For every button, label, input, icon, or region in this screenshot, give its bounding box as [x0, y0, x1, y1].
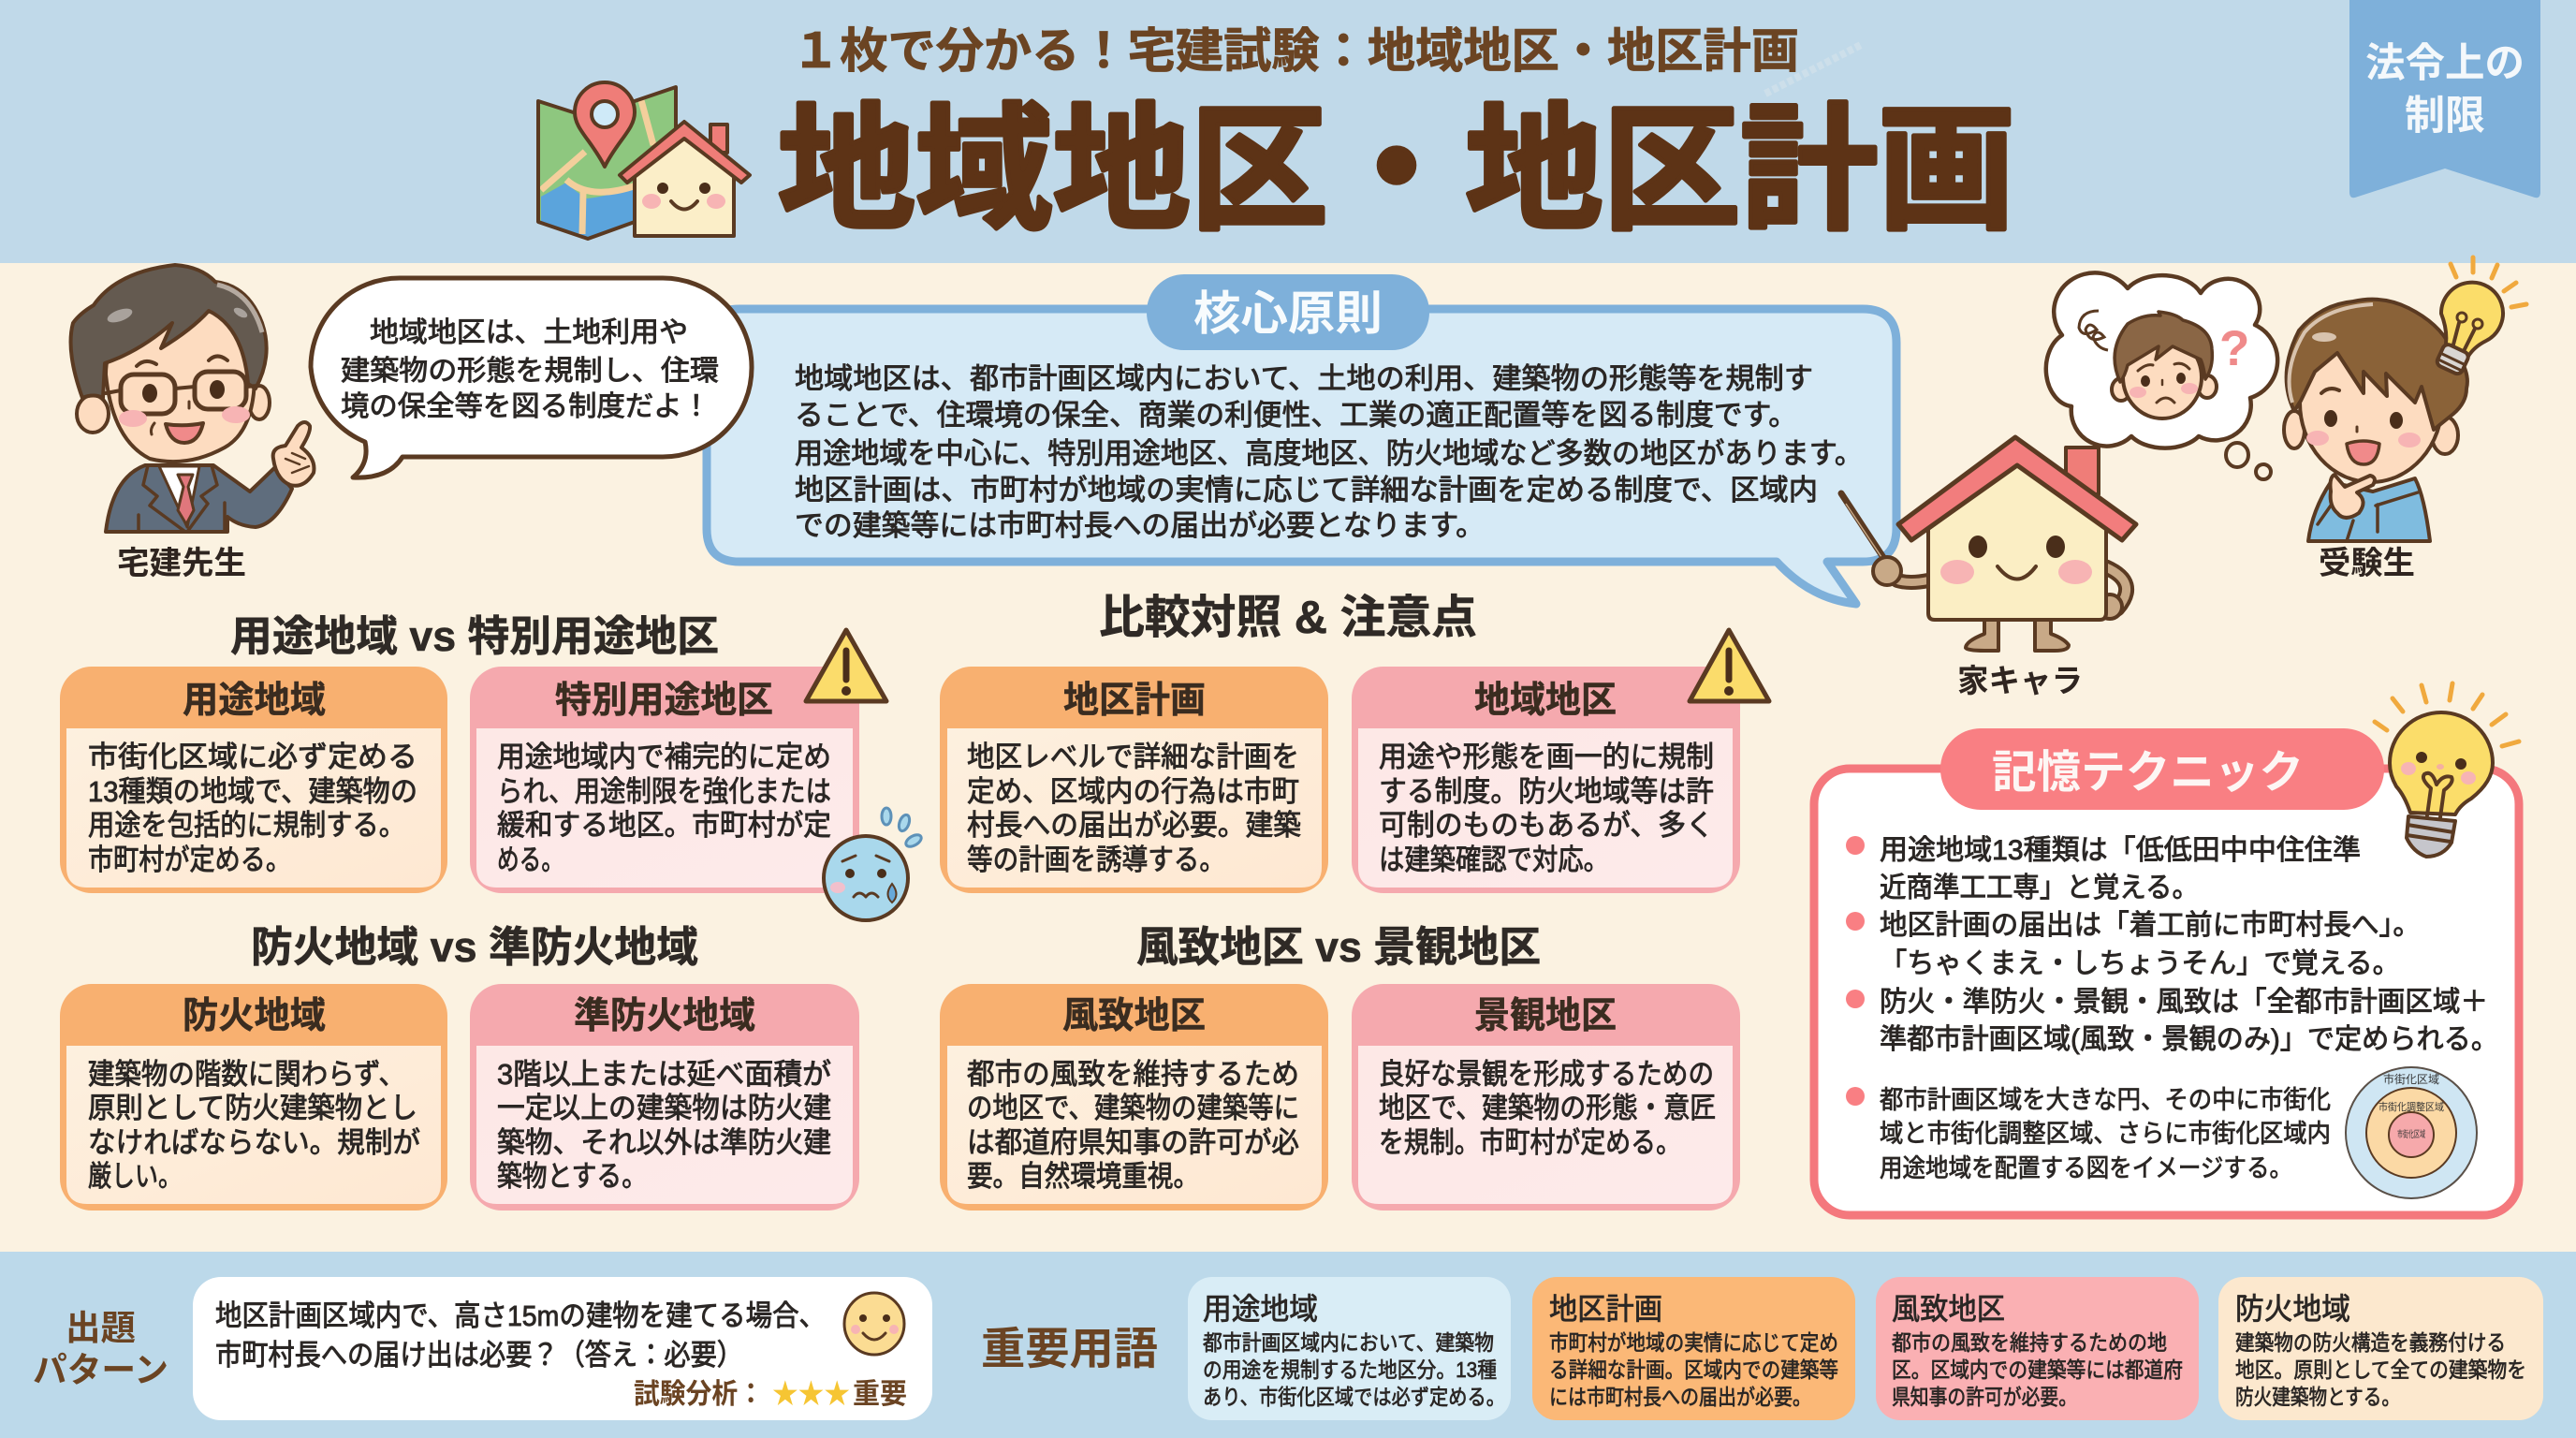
icon: smiley [844, 1293, 904, 1355]
core text [795, 362, 1863, 542]
roof [1898, 437, 2136, 540]
card text: は都道府県知事の許可が必 [967, 1126, 1299, 1159]
exam analysis rating: ★★★ [772, 1379, 850, 1410]
exam analysis rating [634, 1379, 907, 1410]
question mark: ? [2219, 321, 2249, 376]
tips list: 「ちゃくまえ・しちょうそん」で覚える。 [1880, 948, 2400, 979]
card: 地区計画 [940, 667, 1328, 893]
core text: 地域地区は、都市計画区域内において、土地の利用、建築物の形態等を規制す [795, 362, 1813, 395]
exam analysis rating: 試験分析： [634, 1379, 764, 1410]
card text: の地区で、建築物の建築等に [967, 1092, 1299, 1124]
card text: 築物、それ以外は準防火建 [497, 1126, 831, 1159]
suit [106, 465, 292, 532]
speech bubble: teacher: 地域地区は、土地利用や [370, 317, 688, 348]
core text: ることで、住環境の保全、商業の利便性、工業の適正配置等を図る制度です。 [795, 399, 1797, 432]
thought bubble [2046, 272, 2277, 479]
card text: める。 [497, 844, 564, 876]
card text [497, 1058, 831, 1193]
tips list [1846, 835, 2498, 1182]
term card: 地区計画: には市町村長への届出が必要。 [1549, 1385, 1811, 1409]
face [1969, 536, 1987, 558]
diagram: nested circles: 市街化区域 [2397, 1128, 2425, 1140]
card: 特別用途地区 [470, 667, 859, 893]
tips list: 都市計画区域を大きな円、その中に市街化 [1880, 1086, 2331, 1114]
speech bubble: teacher: 建築物の形態を規制し、住環 [341, 356, 719, 387]
chimney [2066, 448, 2099, 494]
card text: 築物とする。 [497, 1160, 647, 1193]
tips list: 地区計画の届出は「着工前に市町村長へ」。 [1880, 910, 2421, 941]
icon: smiling bulb [2375, 683, 2519, 857]
card text: 用途や形態を画一的に規制 [1379, 741, 1714, 773]
ribbon: 法令上の制限: 法令上の [2365, 41, 2525, 86]
card heading: 特別用途地区 [555, 681, 773, 721]
label: 出題パターン [33, 1309, 168, 1389]
speech bubble: teacher [311, 278, 752, 477]
heading: 防火地域 vs 準防火地域: 防火地域 vs 準防火地域 [251, 923, 698, 971]
label: 家キャラ [1957, 664, 2083, 699]
header band [0, 0, 2576, 263]
card text: 緩和する地区。市町村が定 [497, 809, 831, 842]
pill heading: 核心原則 [1193, 287, 1383, 340]
hand [2331, 475, 2375, 518]
card text: なければならない。規制が [88, 1126, 420, 1159]
term card: 用途地域: 用途地域 [1203, 1292, 1318, 1326]
core text: での建築等には市町村長への届出が必要となります。 [795, 509, 1485, 542]
card: 防火地域 [60, 984, 447, 1211]
card text: 建築物の階数に関わらず、 [88, 1058, 405, 1091]
body [2308, 478, 2430, 541]
card: 用途地域 [60, 667, 447, 893]
term card: 防火地域: 防火地域 [2235, 1292, 2350, 1326]
core text: 地区計画は、市町村が地域の実情に応じて詳細な計画を定める制度で、区域内 [795, 474, 1818, 506]
swirl [2079, 311, 2108, 350]
term card: 防火地域: 建築物の防火構造を義務付ける [2235, 1330, 2506, 1355]
card: 地域地区 [1352, 667, 1740, 893]
speech bubble: teacher: 境の保全等を図る制度だよ！ [341, 391, 710, 422]
card text: 原則として防火建築物とし [88, 1092, 417, 1124]
card heading: 用途地域 [183, 681, 326, 721]
term card: 風致地区: 風致地区 [1892, 1292, 2005, 1326]
term card: 風致地区: 区。区域内での建築等には都道府 [1892, 1357, 2183, 1382]
term card: 用途地域: 都市計画区域内において、建築物 [1203, 1330, 1494, 1355]
legs [1966, 618, 1998, 651]
exam analysis rating: 重要 [853, 1379, 907, 1410]
hair [2287, 300, 2467, 430]
ribbon: 法令上の制限 [2349, 0, 2540, 198]
card text [967, 741, 1301, 876]
main title: 地域地区・地区計画 [778, 94, 2015, 246]
footer band [0, 1252, 2576, 1438]
card: 景観地区 [1352, 984, 1740, 1211]
core text: 用途地域を中心に、特別用途地区、高度地区、防火地域など多数の地区があります。 [795, 437, 1863, 470]
diagram: nested circles [2346, 1067, 2477, 1198]
card text [88, 1058, 420, 1193]
card text: 地区で、建築物の形態・意匠 [1379, 1092, 1716, 1124]
term card: 風致地区: 都市の風致を維持するための地 [1892, 1330, 2167, 1355]
card text: 市街化区域に必ず定める [88, 741, 417, 773]
term card: 地区計画: る詳細な計画。区域内での建築等 [1549, 1357, 1838, 1382]
term card: 地区計画 [1532, 1277, 1855, 1420]
hand [273, 422, 314, 486]
diagram: nested circles: 市街化区域 [2383, 1073, 2439, 1086]
term card: 防火地域 [2218, 1277, 2543, 1420]
label: 受験生 [2319, 546, 2415, 581]
card text: られ、用途制限を強化または [497, 775, 831, 808]
icon: warning triangle right [1690, 630, 1769, 701]
idea bulb [2436, 257, 2526, 375]
card text: 用途を包括的に規制する。 [88, 809, 405, 842]
card text: 定め、区域内の行為は市町 [967, 775, 1299, 808]
body [1928, 465, 2106, 620]
character: 家キャラ [1841, 437, 2136, 699]
card text: する制度。防火地域等は許 [1379, 775, 1714, 808]
tips list: 準都市計画区域(風致・景観のみ)」で定められる。 [1880, 1024, 2498, 1055]
card heading: 地域地区 [1474, 681, 1617, 721]
panel: exam question: 市町村長への届け出は必要？（答え：必要） [215, 1339, 743, 1372]
card text [1379, 741, 1714, 876]
card: 準防火地域 [470, 984, 859, 1211]
panel: exam question: 地区計画区域内で、高さ15mの建物を建てる場合、 [215, 1299, 826, 1332]
card text [88, 741, 417, 876]
term card: 防火地域: 防火建築物とする。 [2235, 1385, 2400, 1409]
pill heading [1147, 274, 1429, 350]
diagram: nested circles: 市街化調整区域 [2378, 1100, 2444, 1113]
term card: 用途地域: の用途を規制するた地区分。13種 [1203, 1357, 1497, 1382]
label: 出題パターン: 出題 [66, 1309, 136, 1347]
ears [77, 395, 109, 433]
card text: 市町村が定める。 [88, 844, 291, 876]
heading: 風致地区 vs 景観地区: 風致地区 vs 景観地区 [1136, 923, 1541, 971]
icon: worried face [824, 808, 923, 920]
faint artefact [1765, 45, 1861, 94]
term card: 地区計画: 地区計画 [1549, 1292, 1662, 1326]
card text: 用途地域内で補完的に定め [497, 741, 831, 773]
panel: 核心原則 [707, 274, 1896, 604]
pill heading: 記憶テクニック [1992, 748, 2304, 798]
face [106, 309, 255, 462]
icon: map and house [538, 82, 750, 239]
card text [1379, 1058, 1716, 1159]
card text: を規制。市町村が定める。 [1379, 1126, 1681, 1159]
tips list: 用途地域を配置する図をイメージする。 [1880, 1154, 2292, 1182]
card text [497, 741, 831, 876]
card text: 都市の風致を維持するため [967, 1058, 1299, 1091]
card text [967, 1058, 1299, 1193]
hair [71, 265, 267, 398]
panel: 記憶テクニック [1814, 683, 2519, 1215]
icon: warning triangle left [806, 630, 886, 701]
ribbon: 法令上の制限: 制限 [2405, 94, 2485, 139]
face [2300, 323, 2442, 482]
card text: 可制のものもあるが、多く [1379, 809, 1714, 842]
ears [2284, 411, 2305, 448]
term card: 防火地域: 地区。原則として全ての建築物を [2235, 1357, 2526, 1382]
card heading: 景観地区 [1474, 996, 1617, 1036]
subtitle: １枚で分かる！宅建試験：地域地区・地区計画 [792, 24, 1799, 78]
term card: 風致地区: 県知事の許可が必要。 [1892, 1385, 2077, 1409]
pill heading [1940, 728, 2384, 810]
card text: 等の計画を誘導する。 [967, 844, 1225, 876]
term card: 風致地区 [1876, 1277, 2199, 1420]
tips list: 近商準工工専」と覚える。 [1880, 873, 2199, 903]
character: 受験生 [2284, 257, 2526, 581]
card text: 厳しい。 [88, 1160, 182, 1193]
right arm [2106, 567, 2127, 609]
label: 出題パターン: パターン [33, 1351, 168, 1389]
left arm [1897, 580, 1928, 582]
card text: 要。自然環境重視。 [967, 1160, 1199, 1193]
card text: 良好な景観を形成するための [1379, 1058, 1714, 1091]
panel: exam question [193, 1277, 932, 1420]
label: 重要用語: 重要用語 [981, 1324, 1158, 1373]
card text: 3階以上または延べ面積が [497, 1058, 831, 1091]
label: 宅建先生 [117, 546, 246, 581]
card: 風致地区 [940, 984, 1328, 1211]
pointer [1841, 493, 1886, 562]
tips list: 域と市街化調整区域、さらに市街化区域内 [1880, 1120, 2331, 1148]
term card: 用途地域 [1188, 1277, 1511, 1420]
card text: 13種類の地域で、建築物の [88, 775, 417, 808]
card heading: 準防火地域 [574, 996, 755, 1036]
heading: 比較対照 & 注意点: 比較対照 & 注意点 [1099, 593, 1477, 643]
tips list: 防火・準防火・景観・風致は「全都市計画区域＋ [1880, 987, 2488, 1018]
card heading: 地区計画 [1063, 681, 1206, 721]
term card: 地区計画: 市町村が地域の実情に応じて定め [1549, 1330, 1838, 1355]
card text: 地区レベルで詳細な計画を [967, 741, 1299, 773]
card text: 村長への届出が必要。建築 [967, 809, 1301, 842]
character: 宅建先生 [71, 265, 314, 581]
term card: 用途地域: あり、市街化区域では必ず定める。 [1203, 1385, 1505, 1409]
card heading: 防火地域 [183, 996, 326, 1036]
card heading: 風致地区 [1062, 996, 1206, 1036]
glasses [121, 374, 175, 414]
worried face [2112, 378, 2130, 401]
card text: 一定以上の建築物は防火建 [497, 1092, 831, 1124]
tips list: 用途地域13種類は「低低田中中住住準 [1880, 835, 2361, 866]
heading: 用途地域 vs 特別用途地区: 用途地域 vs 特別用途地区 [230, 612, 719, 660]
card text: は建築確認で対応。 [1379, 844, 1609, 876]
